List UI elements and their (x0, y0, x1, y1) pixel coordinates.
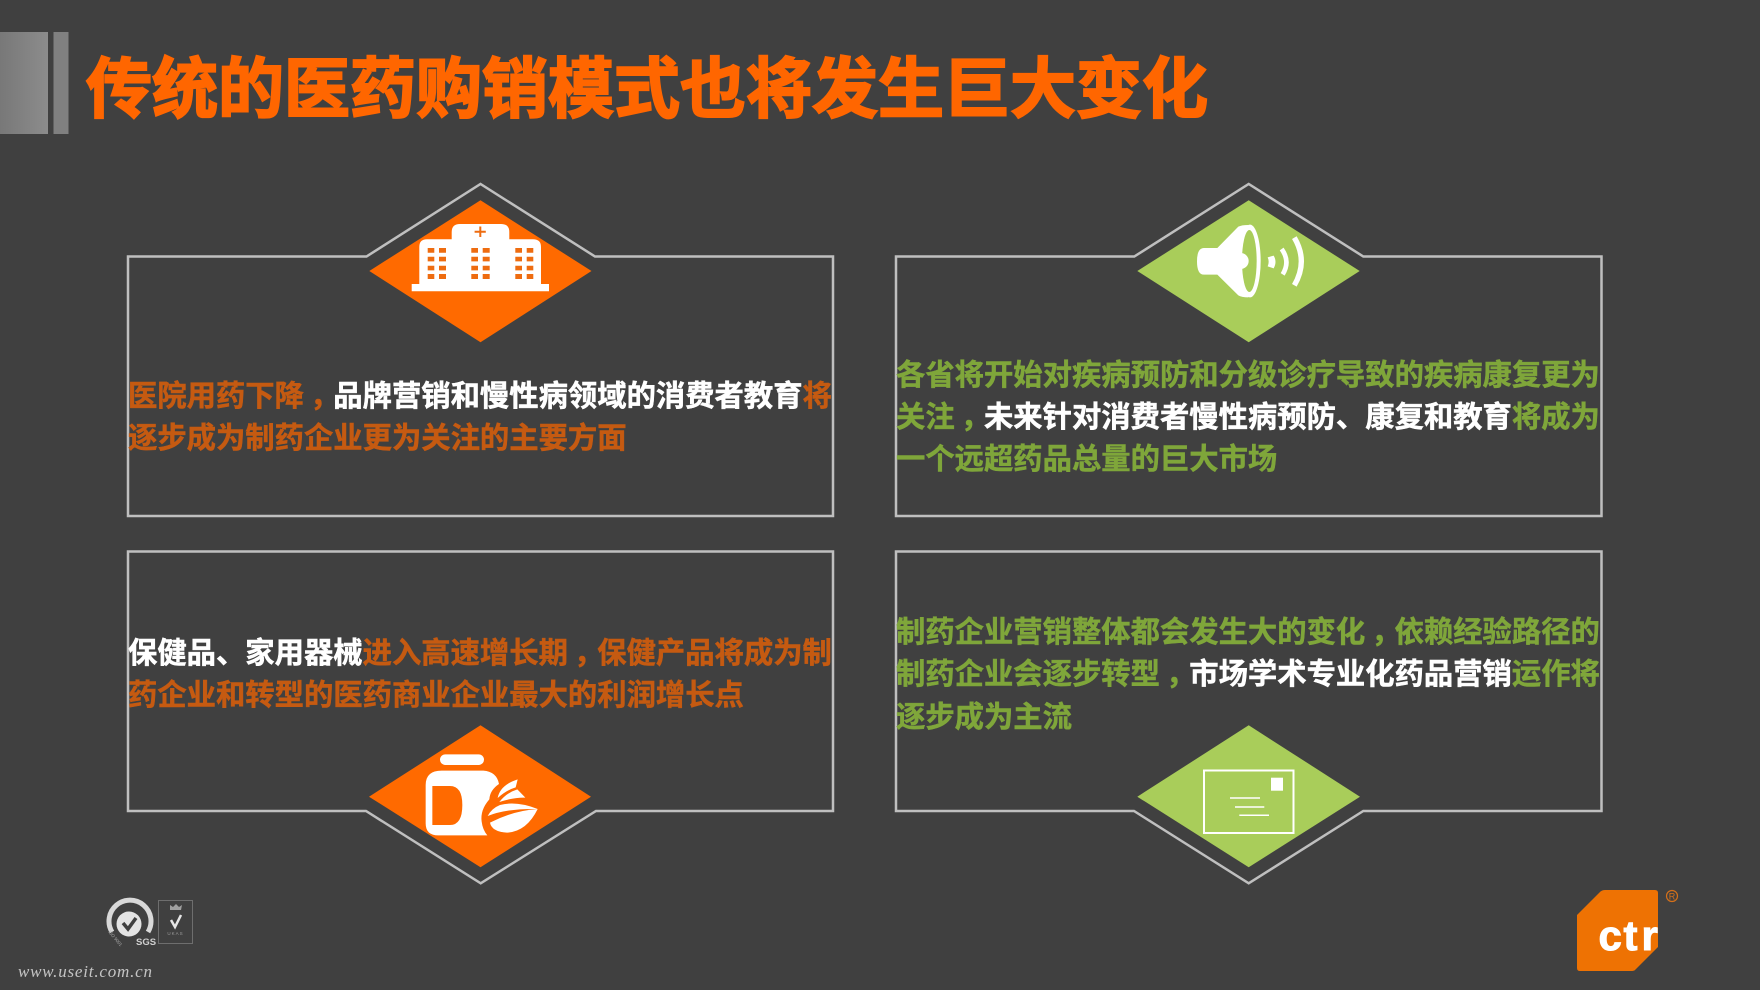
ctr logo: ctr (1598, 912, 1658, 959)
title accent bars (0, 32, 68, 134)
panel text (128, 380, 832, 455)
title: 传统的医药购销模式也将发生巨大变化 (86, 52, 1208, 126)
panel text: 药企业和转型的医药商业企业最大的利润增长点 (128, 679, 744, 712)
website url: www.useit.com.cn (18, 962, 152, 981)
panel text: 各省将开始对疾病预防和分级诊疗导致的疾病康复更为 (896, 359, 1600, 392)
panel outline (896, 552, 1602, 883)
ctr logo (1577, 890, 1678, 971)
panel text: 医院用药下降，品牌营销和慢性病领域的消费者教育将 (128, 380, 832, 413)
icon: supplement bottle diamond (369, 725, 591, 867)
icon: SGS seal: SGS (136, 937, 156, 948)
registered mark: R (1669, 892, 1676, 902)
panel: health products (128, 552, 833, 883)
panel text: 逐步成为主流 (896, 701, 1072, 734)
panel text: 制药企业会逐步转型，市场学术专业化药品营销运作将 (896, 658, 1600, 691)
panel: academic marketing (896, 552, 1602, 883)
panel text: 制药企业营销整体都会发生大的变化，依赖经验路径的 (896, 616, 1600, 649)
panel text (896, 616, 1600, 734)
icon: SGS seal: ISO 9001 (107, 929, 124, 948)
panel text (896, 359, 1600, 476)
panel: hospital drug use (128, 184, 833, 516)
panel text: 逐步成为制药企业更为关注的主要方面 (128, 422, 627, 455)
panel: disease prevention market (896, 184, 1602, 516)
icon: hospital diamond (369, 200, 592, 342)
icon: SGS seal (107, 900, 156, 948)
panel text: 一个远超药品总量的巨大市场 (896, 443, 1277, 476)
panel text: 关注，未来针对消费者慢性病预防、康复和教育将成为 (896, 401, 1600, 434)
panel outline (128, 552, 833, 883)
panel text: 保健品、家用器械进入高速增长期，保健产品将成为制 (128, 637, 832, 670)
icon: UKAS mark: UKAS (167, 931, 184, 936)
panel outline (896, 184, 1602, 516)
certification logos (107, 900, 192, 948)
icon: envelope diamond (1137, 725, 1360, 867)
panel outline (128, 184, 833, 516)
icon: speaker diamond (1137, 200, 1360, 342)
panel text (128, 637, 832, 712)
